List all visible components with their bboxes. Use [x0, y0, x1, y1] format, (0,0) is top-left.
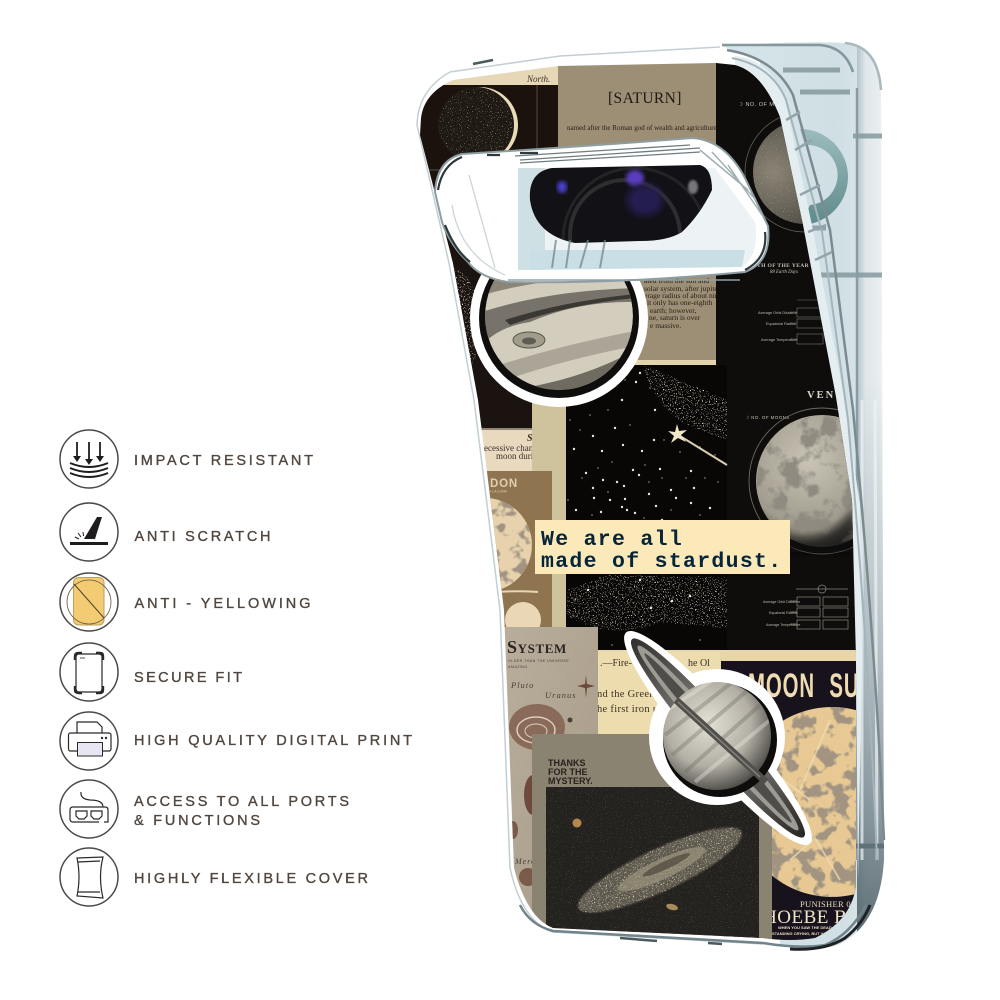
panel: black planet chart: VENUS — [807, 390, 853, 401]
panel: iron age paper card: .—Fire- — [600, 658, 632, 669]
panel: star field — [566, 365, 727, 652]
panel: moon phases paper: S — [527, 433, 533, 444]
label: high quality digital print: HIGH QUALITY DIGITAL PRINT — [134, 733, 412, 749]
icon: crossed yellow phone — [60, 573, 118, 631]
planet: upper — [744, 117, 804, 232]
panel: thanks for the mystery card: MYSTERY. — [548, 776, 593, 786]
camera lens — [530, 165, 712, 243]
panel: black planet chart: ☽ NO. OF MOONS — [745, 415, 790, 420]
phone body behind clear case — [722, 40, 885, 950]
camera ring on phone — [800, 129, 848, 225]
icon: printer — [60, 712, 118, 770]
panel: solar system card: SYSTEM — [507, 637, 567, 657]
data table: lower — [790, 585, 848, 629]
panel: black planet chart: 88 Earth Days — [770, 270, 798, 275]
case bottom right corner — [520, 905, 866, 947]
panel: saturn text card: erage radius of about nine — [644, 291, 723, 300]
panel: black planet chart: Average Orbit Distance — [758, 311, 797, 315]
phone product image — [416, 42, 886, 951]
panel: moon poster: STANDING CRYING, BUT YOU — [772, 931, 829, 936]
panel: thanks for the mystery card — [532, 734, 772, 944]
panel: black planet chart: Equatorial Radius — [769, 611, 798, 615]
data table: upper — [790, 300, 824, 344]
label: impact resistant: IMPACT RESISTANT — [134, 453, 313, 469]
panel: moon poster: WHEN YOU SAW THE DEAD MAN — [778, 925, 842, 930]
star ornament — [577, 675, 595, 698]
feature: high quality digital print — [60, 712, 412, 770]
panel: moon poster — [721, 651, 856, 940]
label: ports and functions: & FUNCTIONS — [134, 813, 260, 829]
panel: iron age paper card: nd the Greek — [597, 689, 655, 700]
panel: black planet chart: ☽ NO. OF MOONS — [738, 101, 793, 108]
panel: solar system card: Uranus — [545, 690, 577, 700]
panel: moon phases paper: moon during — [496, 451, 543, 461]
moon — [772, 707, 856, 897]
feature list — [60, 430, 412, 906]
label: anti yellowing: ANTI - YELLOWING — [134, 596, 310, 612]
panel: saturn text card: e massive. — [650, 321, 681, 330]
feature: flexible cover — [60, 848, 368, 906]
panel: saturn text card: named after the Roman god of wealth and agriculture f — [567, 124, 721, 132]
planet: venus — [748, 408, 854, 554]
label: flexible cover: HIGHLY FLEXIBLE COVER — [134, 871, 368, 887]
feature: anti yellowing — [60, 573, 310, 631]
galaxy — [577, 826, 743, 914]
clear case side band — [735, 56, 862, 880]
icon: bent flexible cover — [60, 848, 118, 906]
panel: black planet chart: Average Temperature — [766, 623, 800, 627]
panel: saturn text card: [SATURN] — [608, 90, 682, 107]
panel: black planet chart: Average Orbit Distance — [763, 600, 800, 604]
icon: phone with corner bumpers — [60, 643, 118, 701]
view of phone inside the cutout — [518, 168, 756, 270]
panel: moon poster: PHOEBE BRIDGERS — [752, 907, 932, 928]
panel: iron age paper card — [597, 650, 860, 735]
label: ports and functions: ACCESS TO ALL PORTS — [134, 794, 349, 810]
feature: secure fit — [60, 643, 242, 701]
poster title: MOON SUN — [748, 667, 875, 704]
panel: moon poster: PUNISHER 07 — [800, 899, 856, 909]
stars — [574, 373, 710, 608]
panel: thanks for the mystery card: THANKS — [548, 758, 586, 768]
panel: solar system card: OLDER THAN THE UNIVERSE — [508, 659, 569, 663]
panel: thanks for the mystery card: FOR THE — [548, 767, 588, 777]
panel: saturn text card: it only has one-eighth — [647, 298, 712, 307]
panel: black planet chart: Average Temperature — [761, 338, 797, 342]
label: we are all made of stardust: made of stardust. — [541, 550, 782, 574]
icon: port block with cable — [60, 780, 118, 838]
panel: solar system card — [500, 627, 598, 927]
rim reflections — [515, 145, 700, 163]
panel: black planet chart — [716, 63, 856, 652]
panel: saturn text card: earth; however, — [650, 306, 696, 315]
printed collage — [420, 63, 856, 940]
icon: falling arrows on layers — [60, 430, 118, 488]
icon: blade scratching a surface — [60, 503, 118, 561]
panel: iron age paper card: he Ol — [688, 658, 710, 669]
label: anti scratch: ANTI SCRATCH — [134, 529, 270, 545]
panel: moon phases paper — [482, 430, 532, 471]
panel: black planet chart: TH OF THE YEAR — [757, 263, 810, 269]
planet illustrations — [508, 704, 572, 886]
clear case outline — [417, 47, 763, 944]
camera cutout of the case — [434, 137, 770, 284]
label: secure fit: SECURE FIT — [134, 670, 242, 686]
panel: solar system card: Pluto — [510, 680, 534, 690]
panel: brown moon card — [487, 471, 552, 627]
panel: brown moon card: DON — [490, 478, 518, 490]
panel: north chart: North. — [526, 74, 550, 84]
panel: dark moon strip left — [451, 256, 532, 431]
case rim highlights — [473, 60, 722, 944]
panel: iron age paper card: he first iron us — [597, 704, 663, 715]
panel: saturn text card: ated from the sun and — [644, 276, 709, 285]
panel: black planet chart: Equatorial Radius — [766, 322, 796, 326]
shooting star — [668, 424, 727, 465]
feature: impact resistant — [60, 430, 313, 488]
panel: saturn text card: solar system, after jupiter — [644, 284, 721, 293]
panel: moon phases paper: ecessive changes — [484, 443, 546, 453]
sticker: saturn — [624, 631, 812, 845]
feature: ports and functions — [60, 780, 349, 838]
panel: saturn text card: ne, saturn is over — [649, 313, 701, 322]
panel: saturn text card — [558, 63, 723, 366]
panel: cream strip — [532, 402, 566, 627]
sticker: jupiter — [470, 274, 648, 407]
panel: solar system card: AMAZING — [508, 665, 528, 669]
planet illustrations: Merc — [514, 857, 536, 866]
label: we are all made of stardust: We are all — [541, 528, 683, 552]
feature: anti scratch — [60, 503, 270, 561]
panel: north chart — [415, 62, 558, 295]
label: we are all made of stardust — [535, 520, 790, 574]
panel: brown moon card: • LA LUNA — [490, 490, 508, 494]
